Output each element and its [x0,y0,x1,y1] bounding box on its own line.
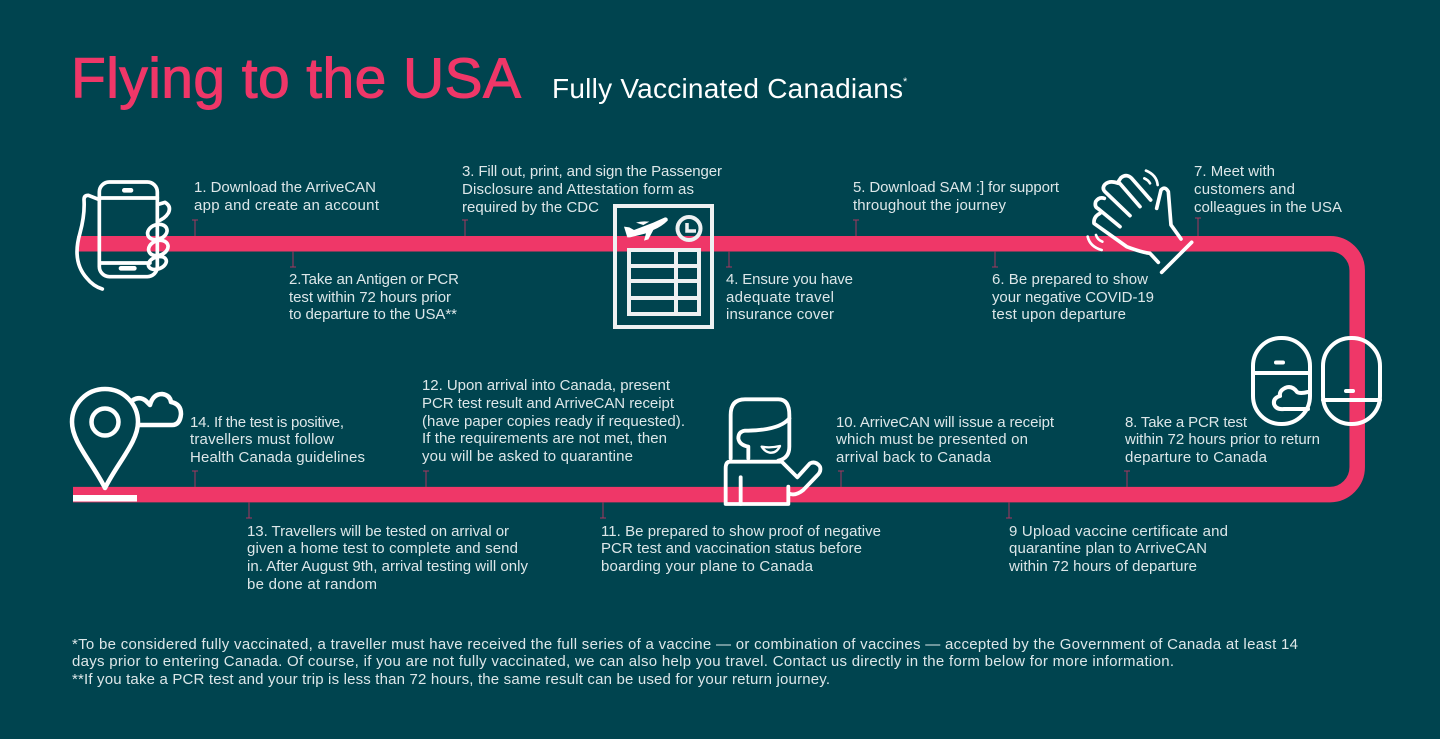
step 10 [835,414,1055,466]
step 4 [726,271,853,323]
step 12: If the requirements are not met, then [422,430,667,447]
step 9 [1008,523,1228,575]
step 7: 7. Meet with [1194,163,1275,180]
footnotes: *To be considered fully vaccinated, a traveller must have received the full series of a vaccine — or combination of vaccines — accepted by the Government of Canada at least 14 [72,636,1298,653]
step 10: 10. ArriveCAN will issue a receipt [836,414,1055,431]
step 13 [247,523,528,593]
step 6 [992,271,1154,323]
step 12 [422,377,685,465]
step 14: Health Canada guidelines [190,449,365,466]
icon: hand holding phone [77,182,170,289]
icon: person waving [726,399,820,504]
step 14: 14. If the test is positive, [190,414,344,431]
step 7 [1194,163,1342,216]
title: Flying to the USA [71,46,521,110]
step 7: colleagues in the USA [1194,199,1342,216]
step 12: (have paper copies ready if requested). [422,413,685,430]
step 8: within 72 hours prior to return [1124,431,1320,448]
step 11: 11. Be prepared to show proof of negative [601,523,881,540]
journey path line [73,244,1357,495]
step 13: in. After August 9th, arrival testing will only [247,558,528,575]
step 3: required by the CDC [462,199,599,216]
step 2: to departure to the USA** [289,306,457,323]
step 12: you will be asked to quarantine [422,448,633,465]
step 11 [601,523,881,575]
step 6: test upon departure [992,306,1126,323]
footnotes [72,636,1298,688]
step 11: PCR test and vaccination status before [601,540,862,557]
icon: location pin and cloud [72,389,181,488]
step 3 [462,163,722,216]
step 1 [194,179,380,214]
step 9: within 72 hours of departure [1008,558,1197,575]
icon: aeroplane windows [1253,338,1380,424]
step 2 [289,271,459,323]
step 13: be done at random [247,576,377,593]
step 5: 5. Download SAM :] for support [853,179,1060,196]
step 2: test within 72 hours prior [289,289,451,306]
step 8 [1124,414,1320,466]
step 8: 8. Take a PCR test [1125,414,1248,431]
step 6: your negative COVID-19 [992,289,1154,306]
step 4: 4. Ensure you have [726,271,853,288]
step 12: 12. Upon arrival into Canada, present [422,377,671,394]
step 9: 9 Upload vaccine certificate and [1009,523,1228,540]
step 9: quarantine plan to ArriveCAN [1009,540,1207,557]
step 13: 13. Travellers will be tested on arrival or [247,523,509,540]
footnotes: days prior to entering Canada. Of course, if you are not fully vaccinated, we can also help you travel. Contact us directly in the form below for more information. [72,653,1174,670]
subtitle: Fully Vaccinated Canadians [552,73,903,104]
step 6: 6. Be prepared to show [992,271,1148,288]
tick markers [192,218,1201,518]
step 7: customers and [1194,181,1295,198]
step 3: Disclosure and Attestation form as [462,181,694,198]
step 8: departure to Canada [1125,449,1268,466]
step 10: which must be presented on [835,431,1028,448]
step 1: app and create an account [194,197,380,214]
step 14 [190,414,365,466]
step 4: insurance cover [726,306,834,323]
subtitle: * [903,76,908,88]
step 10: arrival back to Canada [836,449,992,466]
step 1: 1. Download the ArriveCAN [194,179,376,196]
step 5 [853,179,1060,214]
footnotes: **If you take a PCR test and your trip is less than 72 hours, the same result can be used for your return journey. [72,671,830,688]
icon: airplane [624,217,668,241]
step 11: boarding your plane to Canada [601,558,814,575]
step 14: travellers must follow [190,431,334,448]
icon: waving hand [1088,171,1192,272]
step 2: 2.Take an Antigen or PCR [289,271,459,288]
step 13: given a home test to complete and send [247,540,518,557]
start marker [73,495,137,502]
step 5: throughout the journey [853,197,1006,214]
step 4: adequate travel [726,289,834,306]
step 12: PCR test result and ArriveCAN receipt [422,395,675,412]
icon: travel form [615,206,712,327]
step 3: 3. Fill out, print, and sign the Passenger [462,163,722,180]
